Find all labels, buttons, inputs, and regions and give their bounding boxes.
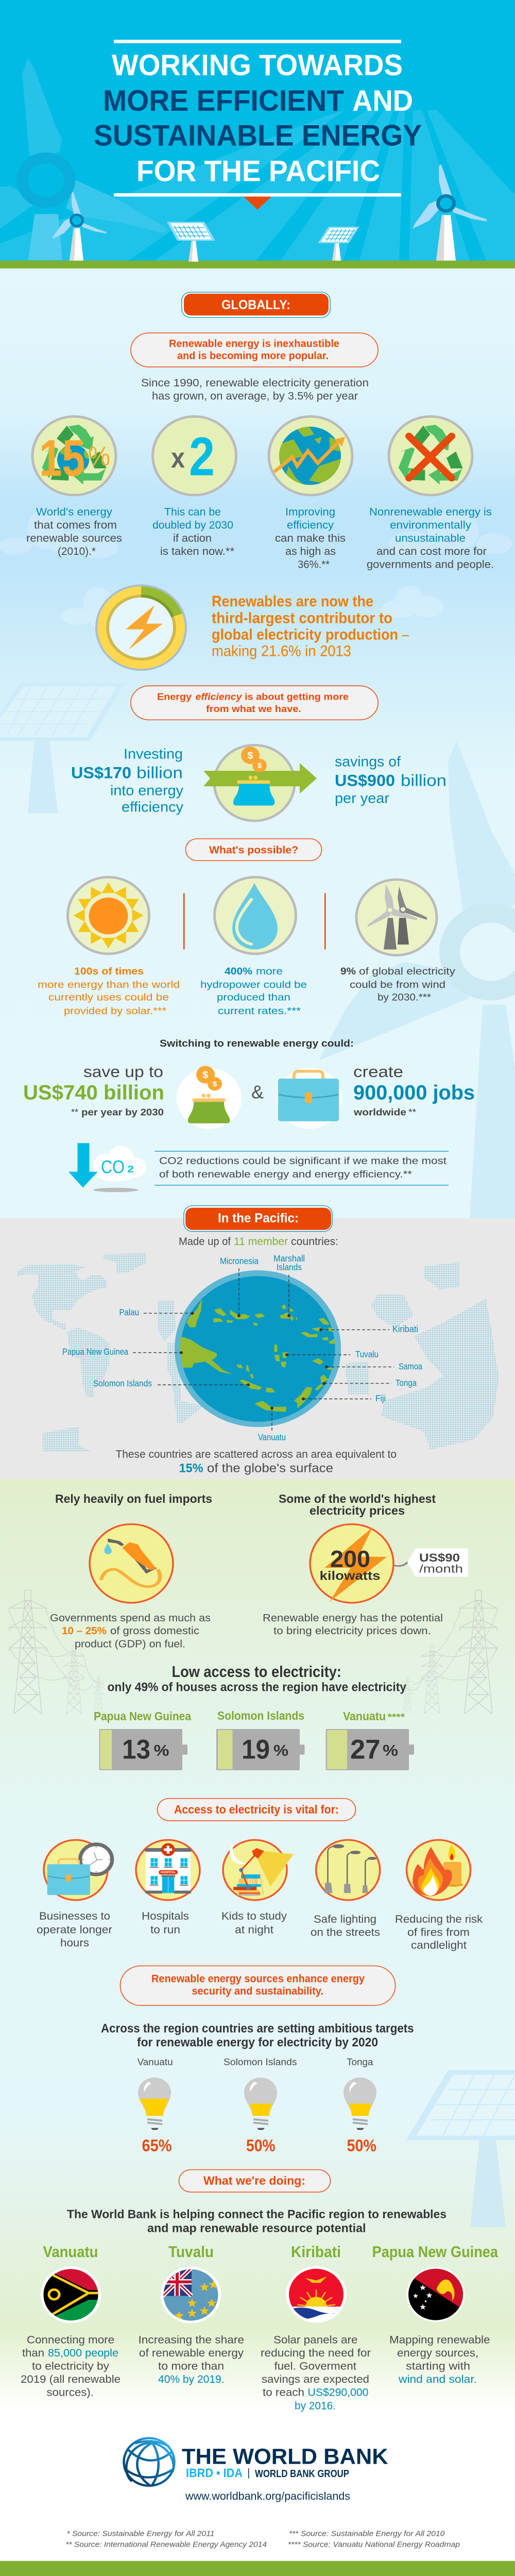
made up of 11 member countries <box>179 1235 338 1247</box>
text: save up to US$740 billion: per year by 2030 <box>81 1107 164 1118</box>
title: AND <box>352 83 413 117</box>
text: World Bank helping <box>67 2208 447 2235</box>
battery: Vanuatu: **** <box>387 1711 405 1723</box>
background large wind turbine <box>0 58 167 260</box>
bulb chart: Solomon Islands 50 percent: Solomon Islands <box>224 2057 297 2067</box>
background solar panel <box>0 683 125 813</box>
map: country labels: Fiji <box>375 1393 386 1403</box>
text: improving efficiency column: can make this <box>275 532 346 544</box>
icon: wind turbines <box>356 879 437 955</box>
text: hydropower potential: more <box>256 966 283 977</box>
made up of 11 member countries: 11 member <box>234 1235 288 1247</box>
text: savings of US$900 billion <box>335 753 447 806</box>
country column: Vanuatu: to electricity by <box>32 2360 110 2372</box>
icon: street lights <box>316 1840 380 1900</box>
text: hydropower potential: 400% <box>225 966 252 977</box>
heading: ambitious targets: for renewable energy for electricity by 2020 <box>137 2036 378 2049</box>
callout: enhance security: Renewable energy sources enhance energy <box>151 1972 365 1985</box>
callout: energy efficiency: from what we have. <box>206 704 301 715</box>
text: governments spend: of gross domestic <box>110 1625 199 1637</box>
solar panel right <box>318 227 359 261</box>
country column: Kiribati: US$290,000 <box>308 2386 368 2398</box>
callout: energy efficiency <box>131 686 378 720</box>
map: country labels: Palau <box>119 1307 139 1317</box>
icon: 200 kilowatts <box>310 1524 408 1603</box>
icon: 15 percent recycling globe: 15 <box>39 429 85 487</box>
text: footnotes: *** Source: Sustainable Energy for All 2010 <box>289 2530 445 2538</box>
battery: Papua New Guinea: 13 <box>122 1734 150 1765</box>
text: investing US$170 billion: Investing <box>124 745 183 761</box>
country column: Tuvalu: to more than <box>158 2360 224 2372</box>
heading: highest electricity prices: electricity prices <box>310 1504 405 1518</box>
bulb chart: Vanuatu 65 percent <box>138 2057 173 2155</box>
text: solar potential <box>38 966 180 1017</box>
logo: World Bank wordmark: WORLD BANK GROUP <box>255 2467 349 2480</box>
text: doubled column <box>152 505 234 557</box>
bulb chart: Tonga 50 percent: 50% <box>347 2137 376 2155</box>
text: reducing fire risk <box>395 1912 483 1952</box>
icon: crossed out recycling symbol <box>389 416 472 495</box>
text: footnotes: * Source: Sustainable Energy for All 2011 <box>67 2530 214 2538</box>
battery: Papua New Guinea: % <box>153 1742 169 1759</box>
bulb chart: Solomon Islands 50 percent: 50% <box>246 2137 275 2155</box>
country column: Tuvalu: of renewable energy <box>139 2347 244 2359</box>
icon: times two: 2 <box>189 427 215 487</box>
text: hospitals <box>142 1910 189 1936</box>
battery: Solomon Islands <box>216 1709 305 1770</box>
text: improving efficiency column: efficiency <box>287 519 334 531</box>
text: wind potential: 9% <box>340 966 356 977</box>
heading: access is vital: Access to electricity is vital for: <box>174 1803 339 1817</box>
panel: global section background decorations <box>0 509 515 1218</box>
country column: Kiribati: Solar panels are <box>273 2333 357 2346</box>
text: third-largest contributor: making 21.6% in 2013 <box>212 643 351 659</box>
callout: renewable energy: and is becoming more popular. <box>177 350 329 362</box>
logo: World Bank wordmark <box>182 2445 388 2480</box>
map: country labels: Tonga <box>396 1377 417 1388</box>
heading: globally button: GLOBALLY: <box>221 297 290 312</box>
text: kids <box>221 1910 287 1936</box>
callout: enhance security: security and sustainability. <box>192 1985 323 1997</box>
divider <box>183 893 184 950</box>
text: investing US$170 billion: US$170 <box>71 764 131 782</box>
text: governments spend <box>50 1612 211 1650</box>
text: kids: Kids to study <box>221 1910 287 1922</box>
map: country labels: Solomon Islands <box>93 1378 152 1388</box>
country column: Tuvalu: Increasing the share <box>138 2333 244 2346</box>
map: country labels: Islands <box>277 1262 302 1272</box>
icon: fuel nozzle <box>90 1524 173 1603</box>
map: country labels: Vanuatu <box>258 1432 286 1442</box>
text: nonrenewable column: environmentally <box>390 519 472 531</box>
logo: World Bank wordmark: THE WORLD BANK <box>182 2445 388 2469</box>
text: nonrenewable column: governments and people. <box>367 558 494 570</box>
icon: green purse with coins <box>177 1066 242 1129</box>
map: country labels: Samoa <box>399 1361 423 1371</box>
country column: Vanuatu <box>21 2243 121 2398</box>
text: world's energy column: World's energy <box>36 505 113 518</box>
text: nonrenewable column <box>367 505 494 570</box>
text: wind potential <box>340 966 456 1003</box>
callout: energy efficiency: is about getting more <box>245 691 349 702</box>
icon: CO2 reduction arrow and cloud <box>68 1143 146 1192</box>
country column: Papua New Guinea: wind and solar. <box>398 2373 477 2385</box>
text: create 900,000 jobs: worldwide <box>353 1107 406 1118</box>
text: renewable energy brings prices down: to bring electricity prices down. <box>273 1625 431 1637</box>
text: wind potential: could be from wind <box>350 979 445 990</box>
map: Pacific globe <box>133 1268 394 1431</box>
map: country labels <box>62 1253 423 1442</box>
heading: highest electricity prices <box>279 1493 436 1518</box>
text: growth since 1990: has grown, on average, by 3.5% per year <box>152 389 358 402</box>
icon: CO2 reduction arrow and cloud: 2 <box>127 1164 134 1175</box>
heading: highest electricity prices: Some of the world's highest <box>279 1493 436 1506</box>
solar panel left <box>167 222 215 262</box>
bulb chart: Solomon Islands 50 percent <box>224 2057 297 2155</box>
text: businesses <box>37 1910 113 1949</box>
price tag: US$90 <box>419 1551 460 1564</box>
country column: Papua New Guinea: Mapping renewable <box>389 2333 490 2346</box>
country column: Vanuatu: 85,000 people <box>48 2347 118 2359</box>
text: world's energy column: (2010).* <box>58 545 96 557</box>
icon: 200 kilowatts: 200 <box>330 1546 370 1572</box>
country column: Kiribati: Kiribati <box>291 2243 341 2261</box>
title bottom rule <box>114 193 401 197</box>
battery: Solomon Islands: 19 <box>242 1734 270 1765</box>
text: footnotes: **** Source: Vanuatu National Energy Roadmap <box>288 2540 460 2549</box>
pointer triangle <box>244 197 271 210</box>
country column: Tuvalu: Tuvalu <box>168 2243 214 2261</box>
battery: Vanuatu <box>326 1710 414 1770</box>
text: CO2 reductions: of both renewable energy and energy efficiency.** <box>159 1169 412 1180</box>
battery: Papua New Guinea <box>94 1710 191 1770</box>
country column: Kiribati: fuel. Goverment <box>274 2360 357 2372</box>
background wind turbine <box>319 741 515 1218</box>
text: solar potential: 100s of times <box>74 966 144 977</box>
panel: World Bank footer <box>0 2438 515 2576</box>
map: leader lines <box>133 1268 394 1431</box>
icon: hospital: HOSPITAL <box>161 1871 176 1874</box>
icon: investment purse with arrow: $ <box>247 750 253 761</box>
panel: switching to renewable energy <box>23 1038 475 1192</box>
text: World Bank helping: and map renewable resource potential <box>147 2222 366 2235</box>
text: CO2 reductions <box>154 1151 449 1185</box>
icon: desk lamp and books <box>223 1840 294 1900</box>
bottom green bar <box>0 2561 515 2576</box>
text: investing US$170 billion <box>71 745 184 815</box>
background light rays <box>0 110 515 261</box>
text: improving efficiency column: as high as <box>285 545 336 557</box>
text: CO2 reductions: CO2 reductions could be significant if we make the most <box>159 1156 447 1166</box>
heading: low access to electricity: only 49% of houses across the region have electricity <box>107 1680 406 1694</box>
panel: what's possible <box>38 839 456 1017</box>
icon: sun <box>68 877 149 954</box>
panel: in the Pacific <box>17 1206 499 1475</box>
text: nonrenewable column: Nonrenewable energy is <box>369 505 492 518</box>
callout: renewable energy: Renewable energy is inexhaustible <box>169 337 339 349</box>
map: country labels: Papua New Guinea <box>62 1346 129 1357</box>
country column: Kiribati: to reach <box>263 2386 304 2398</box>
icon: investment purse with arrow <box>203 745 317 821</box>
country column: Kiribati: reducing the need for <box>261 2347 371 2359</box>
battery: Vanuatu: % <box>383 1742 398 1759</box>
map: country labels: Kiribati <box>392 1324 418 1334</box>
ampersand: & <box>251 1082 264 1103</box>
country column: Tuvalu <box>138 2243 244 2385</box>
heading: in the Pacific button <box>184 1206 332 1231</box>
text: governments spend: product (GDP) on fuel. <box>75 1638 185 1650</box>
text: growth since 1990 <box>141 377 369 402</box>
heading: in the Pacific button: In the Pacific: <box>218 1210 299 1225</box>
country column: Vanuatu: than <box>22 2347 44 2359</box>
flag: Vanuatu <box>41 2266 103 2323</box>
text: solar potential: provided by solar.*** <box>64 1006 166 1017</box>
text: wind potential: by 2030.*** <box>377 992 431 1003</box>
text: renewable energy brings prices down: Renewable energy has the potential <box>263 1612 443 1624</box>
panel: energy challenges <box>9 1493 497 1770</box>
country column: Papua New Guinea: starting with <box>406 2360 470 2372</box>
price tag: /month <box>419 1562 463 1575</box>
bulb chart: Vanuatu 65 percent: 65% <box>142 2137 171 2155</box>
small wind turbine left <box>53 192 107 261</box>
battery: Papua New Guinea: Papua New Guinea <box>94 1710 191 1723</box>
text: third-largest contributor <box>212 594 409 659</box>
text: save up to US$740 billion: save up to <box>83 1063 163 1080</box>
panel: energy efficiency <box>71 686 447 821</box>
text: doubled column: This can be <box>164 505 221 518</box>
text: reducing fire risk: candlelight <box>411 1939 467 1952</box>
text: footnotes: ** Source: International Renewable Energy Agency 2014 <box>65 2540 267 2549</box>
text: 15 percent of the globe's surface: These countries are scattered across an area equivalent to <box>115 1448 397 1460</box>
background solar panel <box>406 2070 515 2227</box>
made up of 11 member countries: Made up of <box>179 1235 231 1247</box>
title top rule <box>114 40 401 43</box>
text: nonrenewable column: and can cost more for <box>376 545 487 557</box>
text: businesses: operate longer <box>37 1923 113 1936</box>
text: savings of US$900 billion: US$900 <box>335 771 395 789</box>
callout: enhance security <box>121 1966 396 2006</box>
battery: Vanuatu: 27 <box>350 1734 380 1765</box>
text: improving efficiency column: 36%.** <box>298 558 330 570</box>
country column: Papua New Guinea <box>372 2243 499 2385</box>
text: world's energy column: that comes from <box>34 519 117 531</box>
country column: Kiribati <box>261 2243 371 2412</box>
icon: green purse with coins: $ <box>202 1070 209 1080</box>
text: save up to US$740 billion: US$740 billion <box>23 1081 164 1104</box>
text: save up to US$740 billion <box>23 1063 164 1118</box>
price tag <box>407 1548 468 1577</box>
text: nonrenewable column: unsustainable <box>395 532 466 544</box>
heading: low access to electricity <box>107 1663 406 1694</box>
text: safe lighting: Safe lighting <box>314 1912 376 1925</box>
icon: 15 percent recycling globe <box>32 416 116 495</box>
bulb chart: Tonga 50 percent <box>344 2057 376 2155</box>
text: improving efficiency column <box>275 505 346 570</box>
heading: what's possible <box>185 839 321 860</box>
country column: Tuvalu: 40% by 2019. <box>158 2373 225 2385</box>
country column: Papua New Guinea: energy sources, <box>397 2347 478 2359</box>
heading: ambitious targets <box>101 2021 414 2049</box>
text: savings of US$900 billion: per year <box>335 790 389 806</box>
bulb chart: Vanuatu 65 percent: Vanuatu <box>138 2057 173 2067</box>
text: reducing fire risk: of fires from <box>407 1926 470 1938</box>
green ground strip <box>0 261 515 268</box>
text: World Bank helping: The World Bank is helping connect the Pacific region to renewables <box>67 2208 447 2221</box>
text: world's energy column: renewable sources <box>26 532 122 544</box>
icon: 15 percent recycling globe: % <box>88 441 110 471</box>
heading: low access to electricity: Low access to electricity: <box>171 1663 341 1681</box>
country column: Kiribati: savings are expected <box>262 2373 369 2385</box>
logo: World Bank wordmark: IBRD • IDA <box>186 2466 243 2480</box>
text: doubled column: doubled by 2030 <box>152 519 233 531</box>
text: create 900,000 jobs <box>353 1063 475 1118</box>
text: solar potential: currently uses could be <box>48 992 169 1003</box>
text: 15 percent of the globe's surface: 15% <box>179 1461 203 1475</box>
title: FOR THE PACIFIC <box>136 154 380 188</box>
heading: what's possible: What's possible? <box>209 844 298 856</box>
panel: globally <box>26 292 494 671</box>
text: hydropower potential: current rates.*** <box>218 1006 301 1017</box>
panel: what we're doing <box>21 2170 499 2412</box>
panel: header banner <box>0 0 515 268</box>
title: SUSTAINABLE ENERGY <box>94 118 422 152</box>
text: investing US$170 billion: billion <box>136 764 183 782</box>
background pylons <box>9 1590 497 1714</box>
logo: World Bank globe <box>124 2438 174 2486</box>
text: safe lighting: on the streets <box>311 1926 380 1938</box>
text: create 900,000 jobs: 900,000 jobs <box>353 1081 475 1104</box>
title: WORKING TOWARDS <box>112 48 403 82</box>
text: 15 percent of the globe's surface <box>115 1448 397 1475</box>
text: businesses: Businesses to <box>39 1910 110 1922</box>
text: businesses: hours <box>60 1937 89 1949</box>
map: country labels: Micronesia <box>220 1256 259 1266</box>
icon: green purse with coins: $ <box>213 1080 217 1088</box>
text: create 900,000 jobs: create <box>353 1063 403 1080</box>
text: save up to US$740 billion: ** <box>71 1107 78 1118</box>
panel: access to electricity <box>37 1799 483 1952</box>
text: improving efficiency column: Improving <box>285 505 335 518</box>
bulb chart: Tonga 50 percent: Tonga <box>347 2057 373 2067</box>
text: third-largest contributor: global electricity production <box>212 627 398 643</box>
text: renewable energy brings prices down <box>263 1612 443 1637</box>
battery: Solomon Islands: % <box>273 1742 288 1759</box>
flag: Papua New Guinea <box>407 2267 466 2323</box>
icon: briefcase and clock <box>44 1840 112 1900</box>
icon: times two: x <box>171 442 185 473</box>
panel: targets <box>101 1966 515 2227</box>
title: MORE EFFICIENT <box>103 83 344 117</box>
heading: what we're doing <box>179 2170 331 2192</box>
heading: ambitious targets: Across the region countries are setting ambitious targets <box>101 2021 414 2036</box>
text: footnotes <box>65 2530 460 2549</box>
text: growth since 1990: Since 1990, renewable electricity generation <box>141 377 369 389</box>
text: hydropower potential: produced than <box>217 992 290 1003</box>
text: third-largest contributor: Renewables are now the <box>212 594 373 610</box>
text: hospitals: Hospitals <box>142 1910 189 1922</box>
text: investing US$170 billion: efficiency <box>122 799 184 815</box>
icon: electricity donut chart <box>95 584 187 671</box>
map: location dots <box>180 1312 328 1410</box>
map: country labels: Tuvalu <box>355 1349 379 1359</box>
large wind turbine right <box>413 164 487 261</box>
country column: Vanuatu: sources). <box>46 2386 94 2398</box>
battery: Vanuatu: Vanuatu <box>343 1710 386 1723</box>
country column: Vanuatu: Vanuatu <box>43 2243 98 2261</box>
text: world's energy column <box>26 505 122 557</box>
heading: what we're doing: What we're doing: <box>203 2174 305 2188</box>
battery: Solomon Islands: Solomon Islands <box>217 1709 304 1723</box>
dotted world map <box>17 1253 499 1452</box>
icon: globe with rising arrow <box>269 416 352 495</box>
text: savings of US$900 billion: billion <box>401 771 447 789</box>
background clouds <box>0 509 512 632</box>
map: country labels: Marshall <box>273 1253 305 1264</box>
country column: Vanuatu: 2019 (all renewable <box>21 2373 121 2385</box>
callout: renewable energy <box>131 333 378 367</box>
text: savings of US$900 billion: savings of <box>335 753 401 769</box>
text: 15 percent of the globe's surface: of the globe's surface <box>207 1461 333 1475</box>
divider <box>324 893 325 950</box>
made up of 11 member countries: countries: <box>291 1235 338 1247</box>
text: doubled column: if action <box>173 532 212 544</box>
text: third-largest contributor: – <box>402 627 409 643</box>
text: website: www.worldbank.org/pacificislands <box>185 2490 350 2502</box>
text: hydropower potential <box>200 966 307 1017</box>
map: islands <box>180 1299 335 1412</box>
icon: water drop <box>214 877 296 954</box>
country column: Vanuatu: Connecting more <box>27 2333 114 2346</box>
title <box>94 48 422 188</box>
text: hydropower potential: hydropower could be <box>200 979 307 990</box>
heading: globally button <box>182 292 330 317</box>
text: wind potential: of global electricity <box>359 966 456 977</box>
text: investing US$170 billion: into energy <box>110 783 184 799</box>
text: third-largest contributor: third-largest contributor to <box>212 611 392 627</box>
heading: rely on fuel imports: Rely heavily on fuel imports <box>55 1493 212 1506</box>
icon: hospital <box>136 1840 200 1900</box>
text: solar potential: more energy than the world <box>38 979 180 990</box>
flag: Kiribati <box>286 2266 346 2324</box>
text: safe lighting <box>311 1912 380 1938</box>
icon: fire and candle <box>407 1840 471 1900</box>
callout: energy efficiency: Energy <box>157 691 192 702</box>
icon: 200 kilowatts: kilowatts <box>319 1569 380 1583</box>
icon: times two <box>152 416 236 495</box>
icon: briefcase <box>277 1068 342 1129</box>
text: governments spend: Governments spend as much as <box>50 1612 211 1624</box>
icon: investment purse with arrow: $ <box>258 762 262 770</box>
country column: Kiribati: by 2016. <box>295 2399 336 2412</box>
text: reducing fire risk: Reducing the risk <box>395 1912 483 1925</box>
text: create 900,000 jobs: ** <box>408 1107 416 1118</box>
text: hospitals: to run <box>150 1923 180 1936</box>
text: governments spend: 10 – 25% <box>62 1625 107 1637</box>
text: doubled column: is taken now.** <box>160 545 234 557</box>
heading: access is vital <box>158 1799 355 1821</box>
text: kids: at night <box>235 1923 274 1936</box>
icon: CO2 reduction arrow and cloud: CO <box>101 1157 125 1177</box>
flag: Tuvalu <box>161 2266 221 2324</box>
heading: switching: Switching to renewable energy could: <box>160 1038 354 1049</box>
callout: energy efficiency: efficiency <box>196 691 243 702</box>
